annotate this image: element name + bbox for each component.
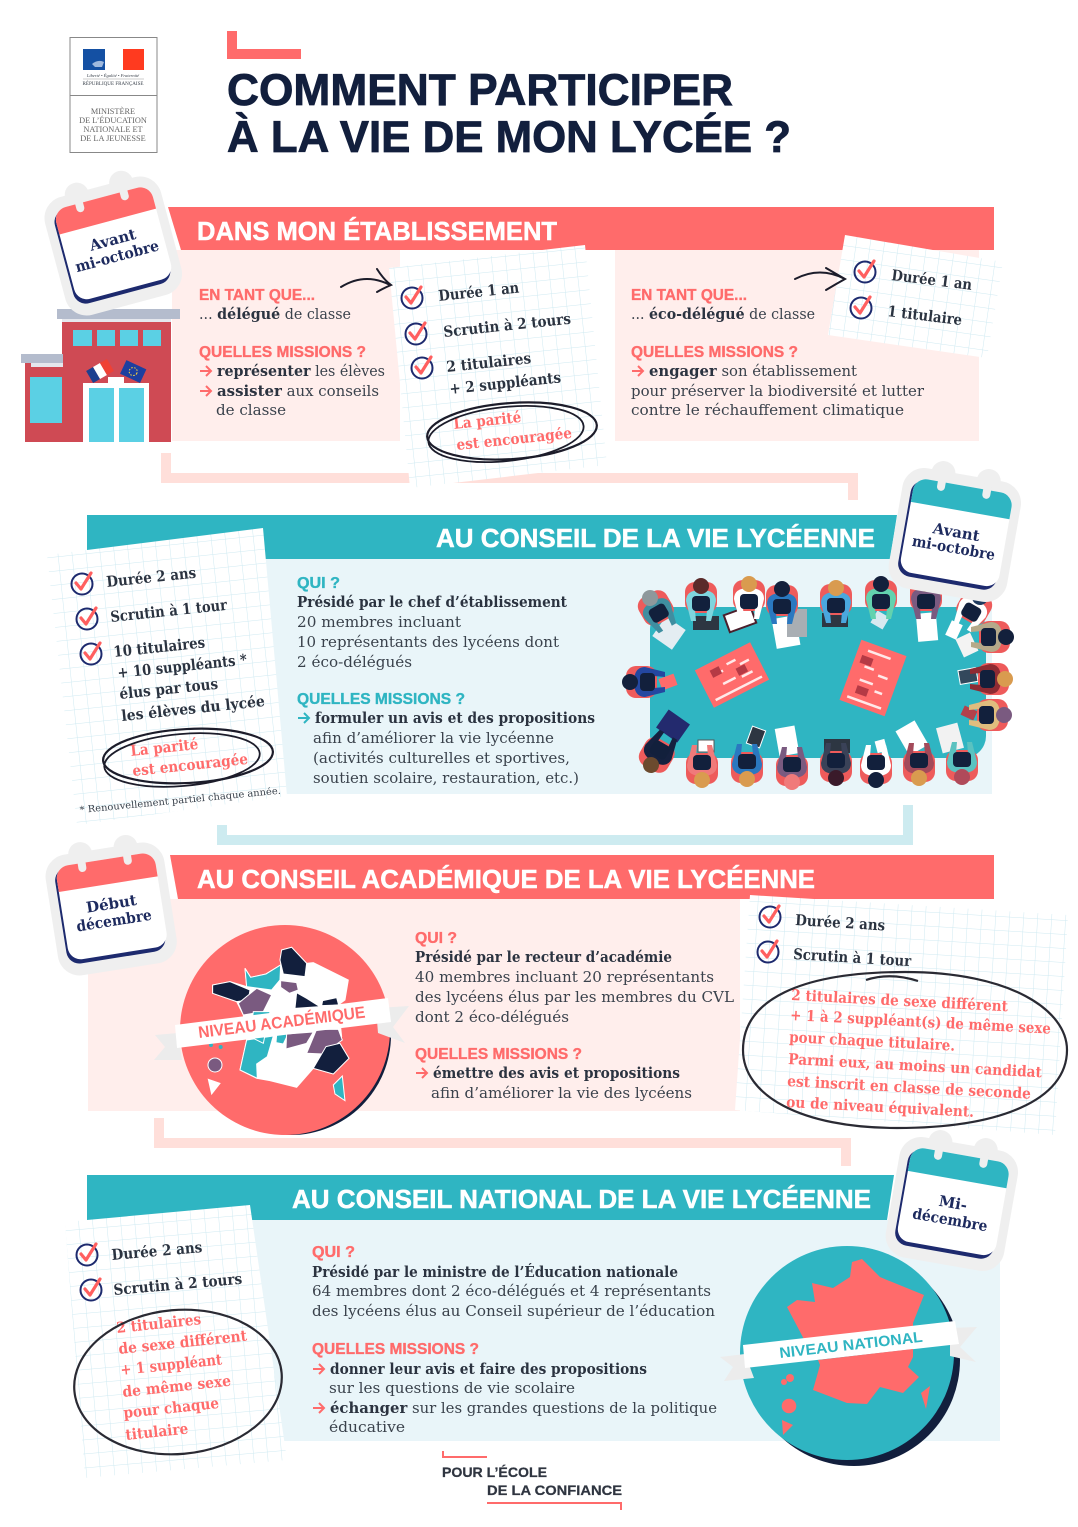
card: CAVL checklist (735, 895, 1068, 1135)
text: CAVL: afin d’améliorer la vie des lycéens (431, 1086, 692, 1102)
text: CNVL: 64 membres dont 2 éco-délégués et 4 représentants (312, 1284, 711, 1300)
text: CVL: soutien scolaire, restauration, etc.) (313, 771, 579, 787)
card: CVL checklist: La parité (130, 735, 199, 760)
card: CNVL checklist: Scrutin à 2 tours (113, 1270, 243, 1299)
text: CNVL (312, 1244, 717, 1436)
text: délégué de classe: représenter les élèves (217, 363, 385, 380)
text: CVL: QUELLES MISSIONS ? (297, 691, 465, 708)
card: CVL checklist: Scrutin à 1 tour (110, 596, 229, 626)
calendar: avant mi-octobre (rouge) (37, 162, 187, 320)
text: éco-délégué de classe: QUELLES MISSIONS ? (631, 344, 798, 361)
text: CNVL: donner leur avis et faire des propositions (330, 1361, 647, 1378)
card: délégué checklist: 2 titulaires (446, 349, 532, 376)
title: COMMENT PARTICIPER (227, 66, 733, 115)
card: CAVL checklist: + 1 à 2 suppléant(s) de même sexe (790, 1006, 1051, 1038)
text: CNVL: sur les questions de vie scolaire (329, 1381, 575, 1397)
band heading: AU CONSEIL ACADÉMIQUE DE LA VIE LYCÉENNE (197, 864, 815, 894)
map: France (781, 1259, 930, 1435)
connector 2 (217, 805, 913, 845)
card: CAVL checklist: Durée 2 ans (795, 911, 886, 934)
text: CVL (297, 575, 595, 787)
band heading: AU CONSEIL DE LA VIE LYCÉENNE (436, 523, 875, 553)
illustration: bâtiment du lycée (21, 309, 180, 442)
card: CAVL checklist: est inscrit en classe de seconde (787, 1072, 1031, 1103)
card: délégué checklist (389, 245, 607, 488)
text: CAVL: dont 2 éco-délégués (415, 1010, 569, 1026)
text: CNVL: QUI ? (312, 1244, 355, 1261)
calendar: début décembre (41, 829, 180, 979)
card: délégué checklist: Durée 1 an (438, 279, 520, 305)
text: CNVL: échanger sur les grandes questions de la politique (330, 1400, 717, 1417)
panel: conseil académique (88, 855, 994, 1111)
card: CAVL checklist: ou de niveau équivalent. (786, 1093, 974, 1121)
text: délégué de classe: ... délégué de classe (199, 306, 351, 323)
band heading: DANS MON ÉTABLISSEMENT (197, 216, 557, 246)
text: délégué de classe: QUELLES MISSIONS ? (199, 344, 366, 361)
connector 3 (154, 1118, 851, 1166)
calendar: avant mi-octobre (bleu): Avant (930, 519, 981, 545)
card: CVL checklist (47, 528, 287, 825)
band heading (87, 1175, 894, 1220)
text: CAVL: Présidé par le recteur d’académie (415, 949, 672, 966)
text: éco-délégué de classe: ... éco-délégué de classe (631, 306, 815, 323)
text: éco-délégué de classe (631, 287, 924, 419)
text: CAVL: émettre des avis et propositions (433, 1065, 680, 1082)
logo: ministère: MINISTÈRE (91, 106, 135, 116)
panel: conseil de la vie lycéenne (87, 515, 992, 794)
text: CVL: (activités culturelles et sportives, (313, 751, 570, 767)
title: À LA VIE DE MON LYCÉE ? (227, 112, 791, 162)
text: CVL: QUI ? (297, 575, 340, 592)
text: délégué de classe: EN TANT QUE... (199, 287, 315, 304)
text: CVL: afin d’améliorer la vie lycéenne (313, 731, 554, 747)
arrow: vers carte éco-délégué (795, 268, 845, 290)
card: CAVL checklist: Scrutin à 1 tour (793, 945, 913, 970)
calendar: avant mi-octobre (rouge): Avant (87, 225, 138, 255)
panel: conseil national (87, 1175, 1000, 1441)
card: CNVL checklist (65, 1205, 288, 1478)
text: CNVL: QUELLES MISSIONS ? (312, 1341, 479, 1358)
calendar: avant mi-octobre (rouge): mi-octobre (73, 237, 161, 276)
card: CNVL checklist: pour chaque (123, 1394, 220, 1422)
papers and devices (652, 606, 978, 757)
card: éco-délégué checklist: Durée 1 an (891, 266, 973, 294)
panel: dans mon établissement (168, 207, 994, 445)
card: CVL checklist: * Renouvellement partiel chaque année. (79, 786, 281, 816)
band heading (170, 855, 994, 899)
text: délégué de classe (199, 287, 385, 419)
text: CAVL (415, 930, 734, 1102)
card: délégué checklist: est encouragée (456, 424, 573, 454)
footer: pour l'école de la confiance (442, 1451, 622, 1510)
logo: ministère (70, 38, 157, 152)
text: CVL: 2 éco-délégués (297, 655, 412, 671)
globe: niveau académique (154, 925, 409, 1135)
text: CAVL: QUELLES MISSIONS ? (415, 1046, 582, 1063)
card: CAVL checklist: Parmi eux, au moins un candidat (788, 1050, 1042, 1081)
card: CVL checklist: + 10 suppléants * (117, 650, 248, 682)
card: CAVL checklist: pour chaque titulaire. (789, 1028, 956, 1055)
text: éco-délégué de classe: EN TANT QUE... (631, 287, 747, 304)
card: délégué checklist: La parité (453, 408, 522, 433)
card: CVL checklist: Durée 2 ans (106, 564, 197, 591)
banner (154, 998, 409, 1060)
illustration: table de réunion (622, 576, 1014, 790)
text: CAVL: des lycéens élus par les membres du CVL (415, 990, 734, 1006)
people around the table (622, 576, 1014, 790)
text: éco-délégué de classe: engager son établissement (649, 363, 857, 380)
text: CVL: 10 représentants des lycéens dont (297, 635, 559, 651)
calendar: mi-décembre: décembre (911, 1204, 989, 1235)
logo: ministère: DE LA JEUNESSE (80, 134, 146, 143)
card: CVL checklist: élus par tous (119, 675, 219, 703)
card: CNVL checklist: 2 titulaires (116, 1310, 202, 1337)
text: CNVL: éducative (329, 1420, 405, 1436)
calendar: mi-décembre: Mi- (937, 1192, 969, 1215)
poster 1 (695, 642, 769, 708)
card: CNVL checklist: titulaire (125, 1419, 189, 1444)
connector 1 (161, 453, 858, 500)
text: éco-délégué de classe: contre le réchauffement climatique (631, 403, 904, 419)
band heading: AU CONSEIL NATIONAL DE LA VIE LYCÉENNE (292, 1184, 871, 1214)
logo: ministère: Liberté • Égalité • Fraternité (86, 73, 140, 78)
calendar: avant mi-octobre (bleu): mi-octobre (911, 532, 996, 564)
text: délégué de classe: assister aux conseils (217, 383, 379, 400)
text: CVL: formuler un avis et des propositions (315, 710, 595, 727)
card: CNVL checklist: de sexe différent (118, 1327, 248, 1358)
card: éco-délégué checklist (828, 235, 1003, 358)
footer: pour l'école de la confiance: POUR L’ÉCOLE (442, 1464, 547, 1480)
card: délégué checklist: + 2 suppléants (449, 368, 562, 398)
banner: NIVEAU NATIONAL (779, 1329, 924, 1362)
card: CVL checklist: est encouragée (132, 750, 249, 780)
map: académies (208, 947, 349, 1101)
calendar: mi-décembre (882, 1124, 1023, 1274)
banner (720, 1321, 977, 1404)
band heading (87, 515, 897, 559)
card: éco-délégué checklist: 1 titulaire (887, 302, 963, 329)
arrow: vers carte délégué (341, 269, 391, 292)
logo: ministère: NATIONALE ET (83, 125, 143, 134)
logo: ministère: RÉPUBLIQUE FRANÇAISE (82, 79, 144, 87)
card: CVL checklist: les élèves du lycée (121, 692, 266, 725)
text: CAVL: 40 membres incluant 20 représentants (415, 970, 714, 986)
globe: niveau national (720, 1246, 977, 1466)
logo: ministère: DE L’ÉDUCATION (79, 115, 147, 125)
card: CNVL checklist: de même sexe (122, 1372, 232, 1401)
band heading (168, 207, 994, 250)
poster 2 (840, 640, 906, 716)
card: CVL checklist: 10 titulaires (113, 633, 206, 661)
text: CNVL: Présidé par le ministre de l’Éducation nationale (312, 1263, 678, 1281)
card: délégué checklist: Scrutin à 2 tours (443, 310, 572, 341)
title (227, 66, 791, 162)
title accent bracket (227, 31, 301, 59)
banner: NIVEAU ACADÉMIQUE (197, 1003, 366, 1042)
text: éco-délégué de classe: pour préserver la biodiversité et lutter (631, 384, 924, 400)
text: CVL: 20 membres incluant (297, 615, 461, 631)
card: CNVL checklist: Durée 2 ans (111, 1238, 203, 1264)
text: délégué de classe: de classe (216, 403, 286, 419)
text: CAVL: QUI ? (415, 930, 457, 947)
calendar: début décembre: Début (85, 891, 138, 917)
text: CNVL: des lycéens élus au Conseil supérieur de l’éducation (312, 1304, 715, 1320)
map: south of France under banner (813, 1349, 919, 1404)
footer: pour l'école de la confiance: DE LA CONFIANCE (487, 1482, 622, 1498)
calendar: avant mi-octobre (bleu) (885, 455, 1026, 605)
card: CAVL checklist: 2 titulaires de sexe différent (791, 986, 1008, 1015)
card: CNVL checklist: + 1 suppléant (120, 1350, 223, 1379)
text: CVL: Présidé par le chef d’établissement (297, 594, 567, 611)
icon: drapeaux (86, 359, 146, 383)
calendar: début décembre: décembre (75, 906, 153, 936)
